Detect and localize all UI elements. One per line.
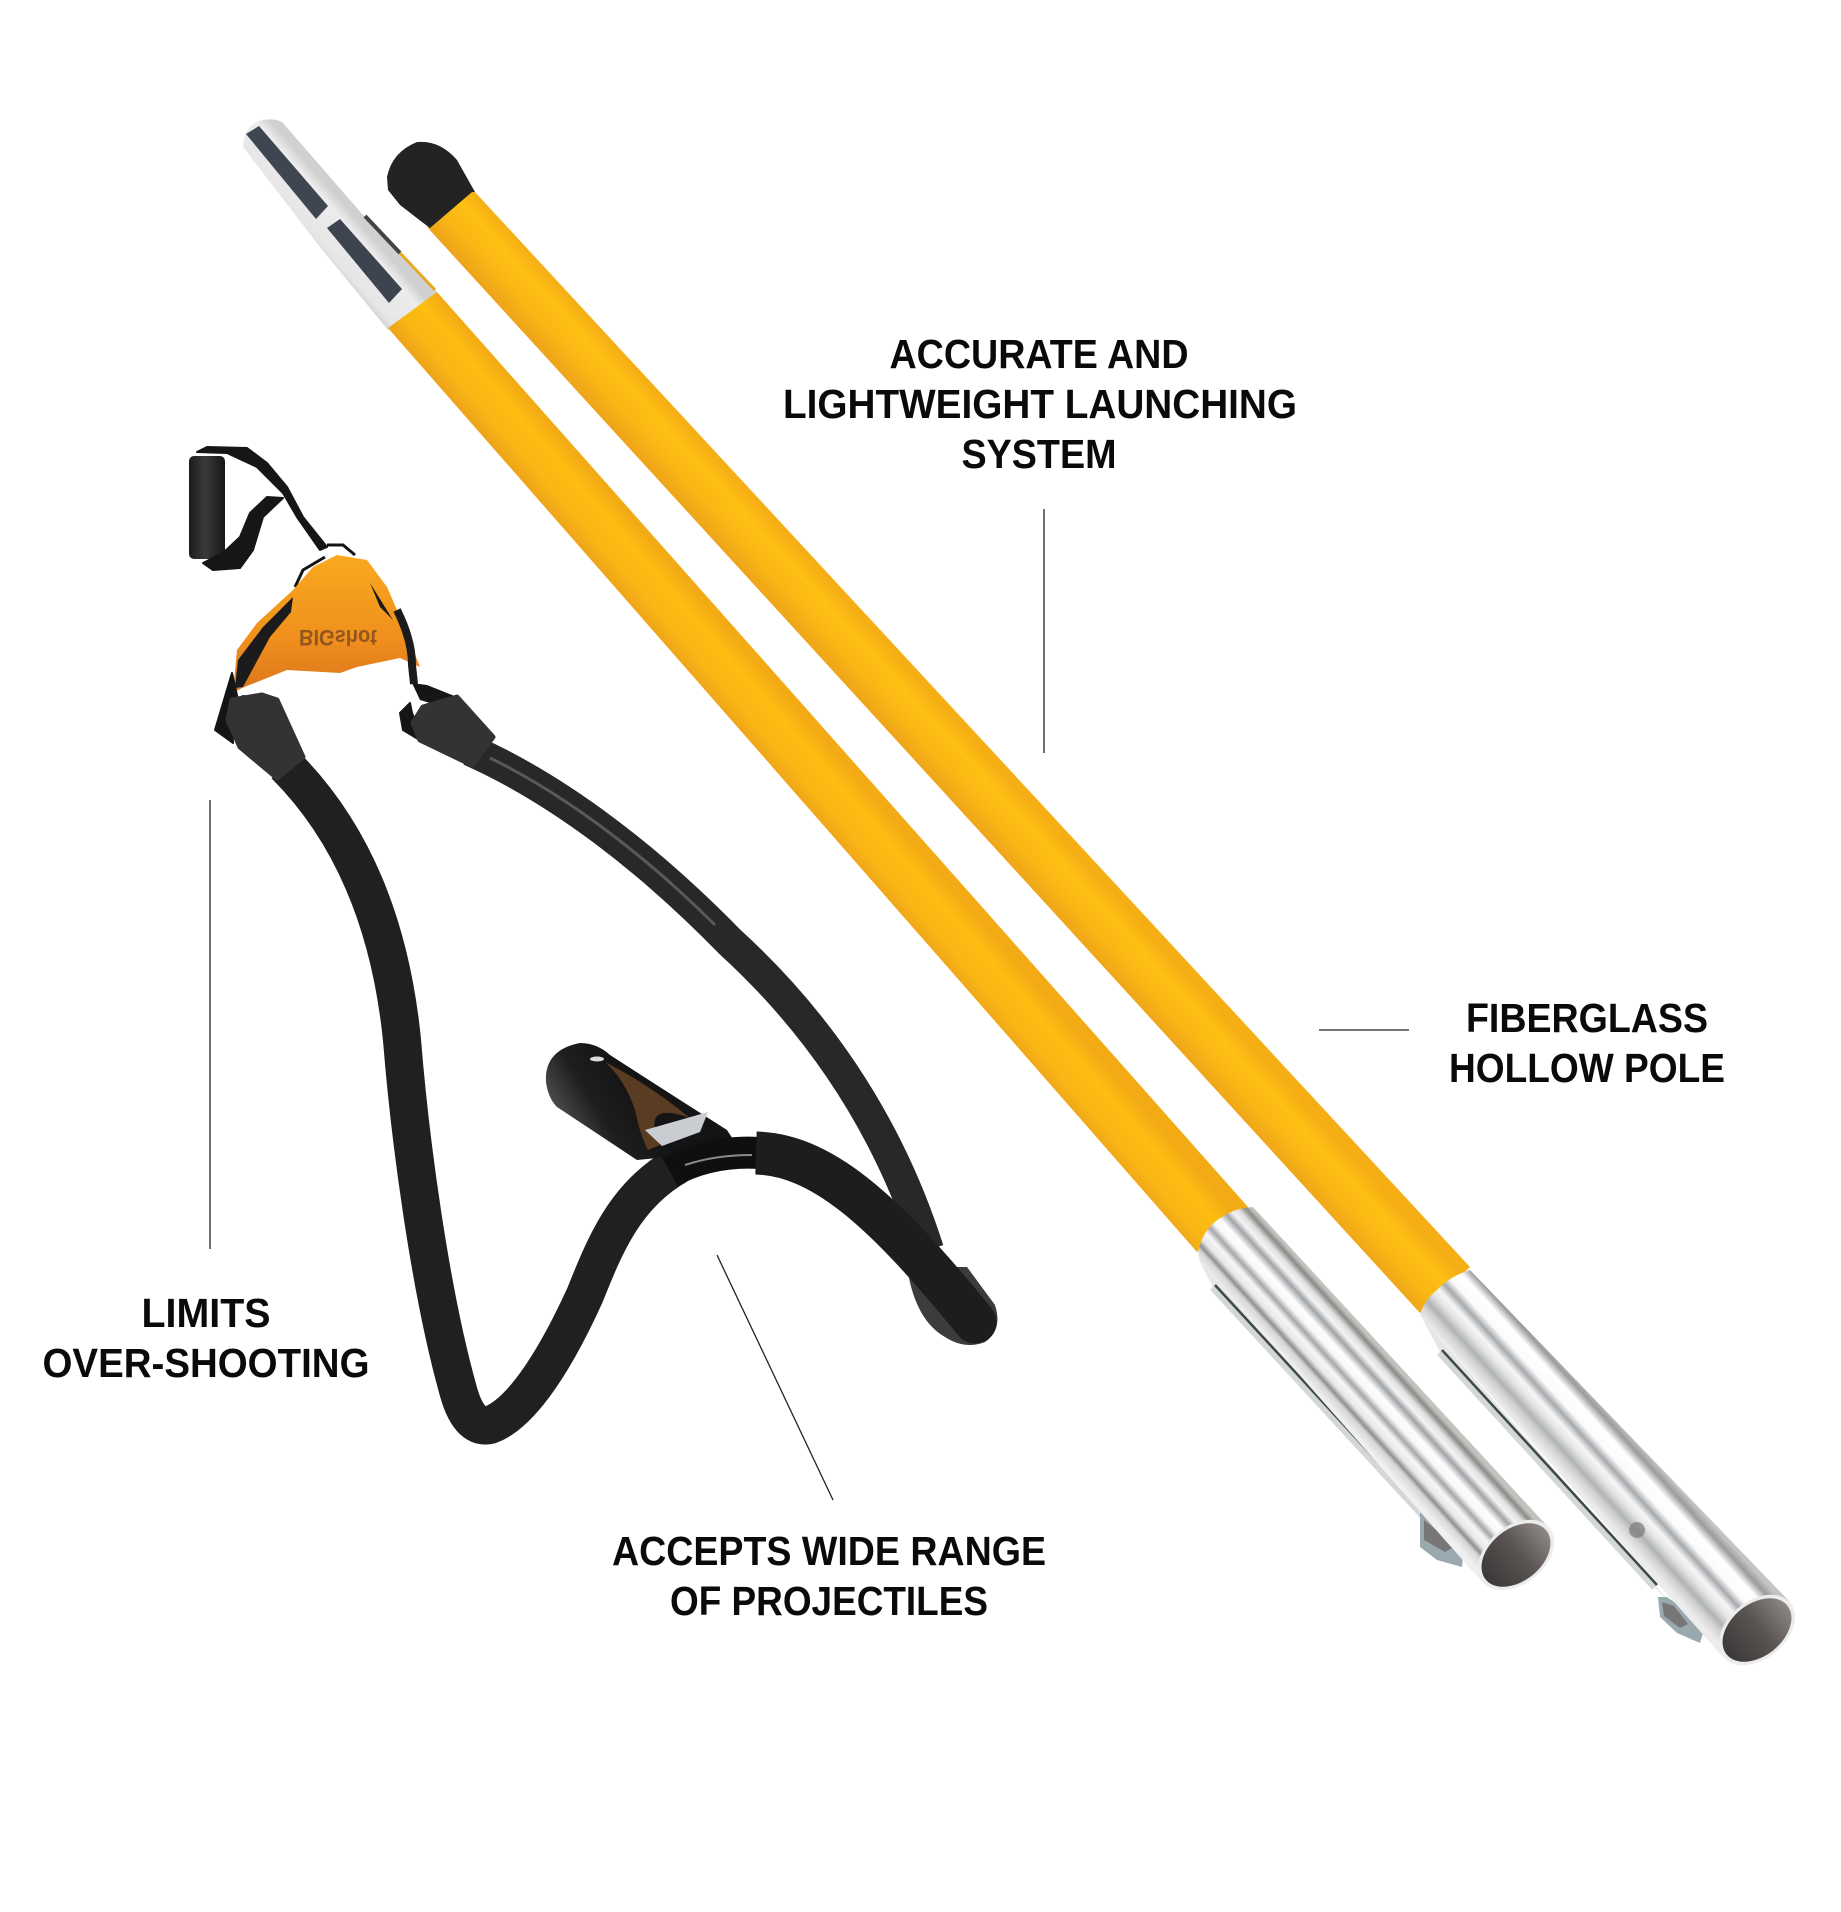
pull straps bbox=[197, 447, 355, 587]
callout: limits over-shooting bbox=[42, 1290, 370, 1386]
right pole yellow shaft bbox=[427, 190, 1470, 1313]
callout: accurate and lightweight launching system: ACCURATE AND bbox=[890, 331, 1188, 377]
product: right pole bbox=[387, 142, 1809, 1680]
back loop of tube bbox=[907, 1267, 997, 1345]
callout: accurate and lightweight launching system: LIGHTWEIGHT LAUNCHING bbox=[783, 381, 1297, 427]
callout: accepts wide range of projectiles: ACCEPTS WIDE RANGE bbox=[612, 1528, 1046, 1574]
left sleeve and strap loop bbox=[215, 673, 303, 778]
callout: limits over-shooting: OVER-SHOOTING bbox=[42, 1340, 370, 1386]
leader line: limits over-shooting bbox=[209, 800, 211, 1249]
callout: fiberglass hollow pole: HOLLOW POLE bbox=[1449, 1045, 1725, 1091]
leader line: fiberglass bbox=[1319, 1029, 1409, 1031]
right pole black rubber cap bbox=[387, 142, 475, 228]
pouch holder with logo bbox=[546, 1043, 740, 1160]
callout: accurate and lightweight launching system bbox=[783, 331, 1297, 477]
right pole silver bottom sleeve bbox=[1420, 1270, 1809, 1680]
product: slingshot launcher bbox=[189, 447, 997, 1426]
left and centre rubber tube bbox=[285, 765, 678, 1426]
callout: accepts wide range of projectiles: OF PROJECTILES bbox=[670, 1578, 988, 1624]
right rubber sleeve bbox=[756, 1153, 996, 1344]
left pole yellow shaft bbox=[388, 292, 1248, 1252]
callout: accepts wide range of projectiles bbox=[612, 1528, 1046, 1624]
metal wrap joint bbox=[670, 1153, 760, 1172]
product: left pole bbox=[243, 119, 1568, 1605]
left pole silver top ferrule bbox=[243, 119, 437, 330]
pouch printed logo, mirrored: BIGshot bbox=[299, 625, 378, 650]
hand grip bbox=[189, 456, 225, 559]
leader line: launching system bbox=[1043, 509, 1045, 753]
far rubber tube bbox=[470, 750, 928, 1250]
callout: fiberglass hollow pole bbox=[1449, 995, 1725, 1091]
right tube and sleeve bbox=[400, 683, 493, 765]
orange pouch bbox=[233, 555, 420, 693]
callout: fiberglass hollow pole: FIBERGLASS bbox=[1466, 995, 1708, 1041]
callout: accurate and lightweight launching system: SYSTEM bbox=[962, 431, 1116, 477]
left pole silver bottom sleeve bbox=[1198, 1207, 1568, 1605]
leader line: projectiles bbox=[717, 1255, 833, 1500]
callout: limits over-shooting: LIMITS bbox=[142, 1290, 270, 1336]
